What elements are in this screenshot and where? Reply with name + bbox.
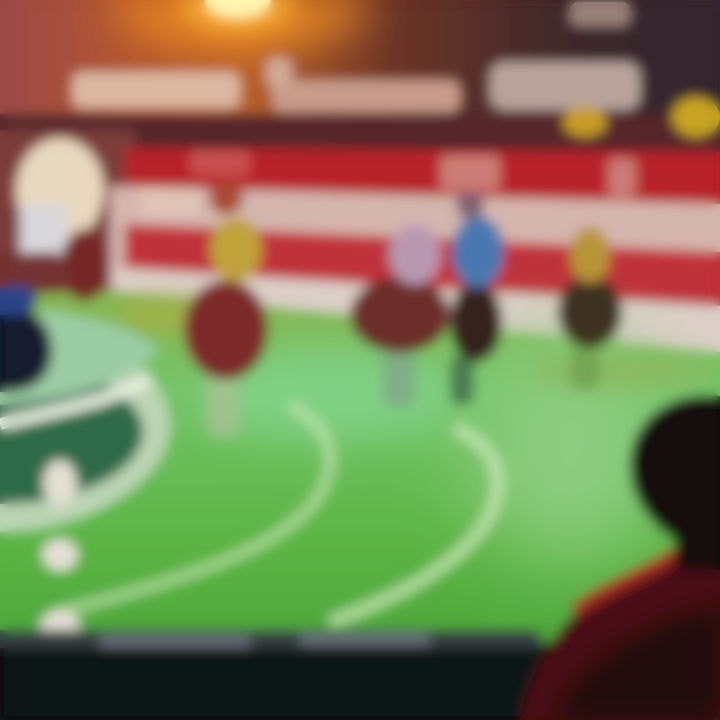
yellow signage blobs <box>563 97 720 137</box>
white track arcs on turf <box>60 405 498 622</box>
horse and rider: yellow <box>184 182 268 438</box>
blurred signage lettering <box>72 2 640 112</box>
horse and rider: pale purple <box>350 225 450 408</box>
horse and rider: blue <box>450 191 504 405</box>
dark blue figure at left <box>0 285 52 392</box>
black lower border <box>0 630 720 720</box>
stand banners: red and white stripes <box>110 148 720 400</box>
stadium ring at left <box>0 310 170 532</box>
horse and rider: yellow and dark <box>558 227 622 390</box>
sun glare <box>110 0 370 48</box>
background sky and upper stands <box>0 0 720 310</box>
green turf field <box>0 290 720 650</box>
left white spotlight <box>16 138 104 255</box>
horse at far left <box>0 229 109 301</box>
white markers on left <box>40 460 80 646</box>
silhouette of spectator <box>520 395 720 720</box>
